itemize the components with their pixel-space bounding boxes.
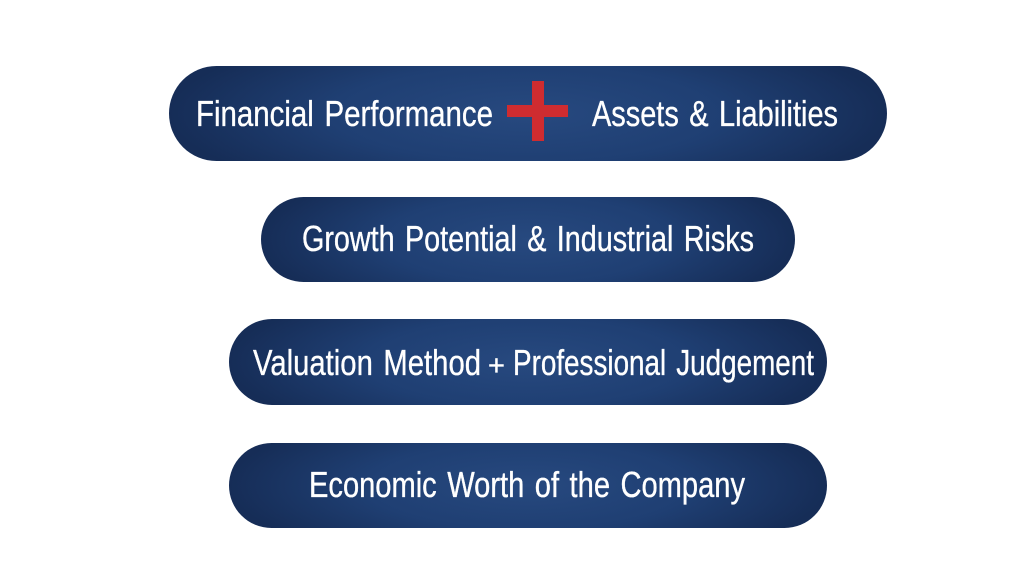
label: assets and liabilities: Assets & Liabilities [592, 93, 838, 134]
pill: financial performance plus assets and liabilities [169, 66, 887, 161]
pill: growth potential and industrial risks: Growth Potential & Industrial Risks [302, 218, 754, 259]
pill: growth potential and industrial risks [261, 197, 795, 282]
icon: red plus [507, 81, 568, 141]
pill: economic worth of the company: Economic Worth of the Company [309, 464, 745, 505]
label: financial performance: Financial Performance [196, 93, 493, 134]
pill: valuation method plus professional judgement: Valuation Method [253, 342, 481, 383]
pill: valuation method plus professional judgement [229, 319, 827, 405]
pill: economic worth of the company [229, 443, 827, 528]
pill: valuation method plus professional judgement: + [488, 350, 505, 382]
pill: valuation method plus professional judgement: Professional Judgement [513, 342, 814, 383]
